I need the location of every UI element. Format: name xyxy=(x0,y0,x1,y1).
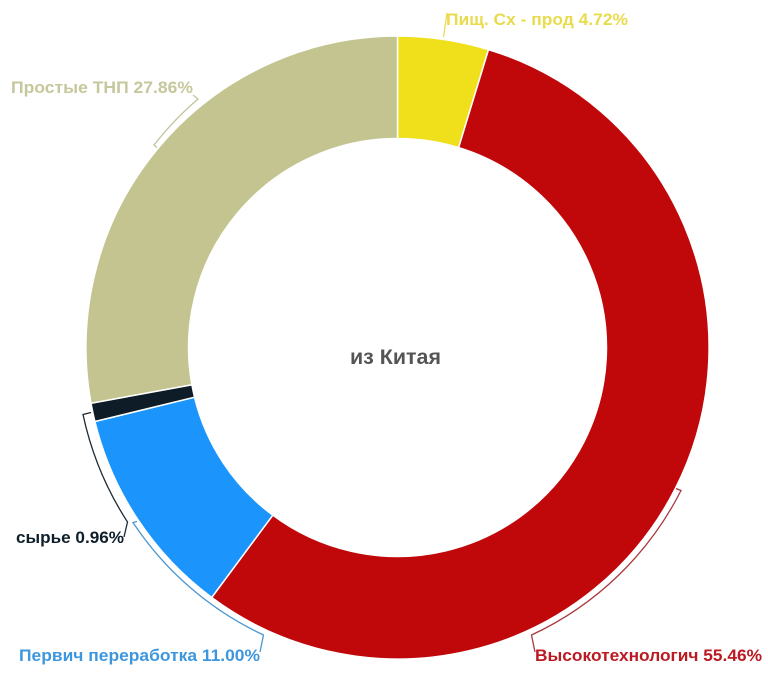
slice: Простые ТНП xyxy=(86,36,398,403)
label: сырье 0.96%: сырье 0.96% xyxy=(16,528,124,547)
slice: Пищ. Сх - прод xyxy=(398,36,488,148)
label: сырье 0.96% xyxy=(16,412,128,547)
slice: Высокотехнологич xyxy=(212,50,709,659)
label: Первич переработка 11.00%: Первич переработка 11.00% xyxy=(19,646,260,665)
label: Высокотехнологич 55.46%: Высокотехнологич 55.46% xyxy=(535,646,762,665)
slice: Первич переработка xyxy=(95,397,273,598)
label: Пищ. Сх - прод 4.72% xyxy=(444,10,628,37)
label: Высокотехнологич 55.46% xyxy=(532,488,762,665)
label: Простые ТНП 27.86%: Простые ТНП 27.86% xyxy=(11,78,193,97)
slice: сырье xyxy=(91,385,194,422)
label: Простые ТНП 27.86% xyxy=(11,78,198,148)
label: Первич переработка 11.00% xyxy=(19,522,264,665)
center label: из Китая xyxy=(350,346,441,369)
label: Пищ. Сх - прод 4.72%: Пищ. Сх - прод 4.72% xyxy=(446,10,628,29)
